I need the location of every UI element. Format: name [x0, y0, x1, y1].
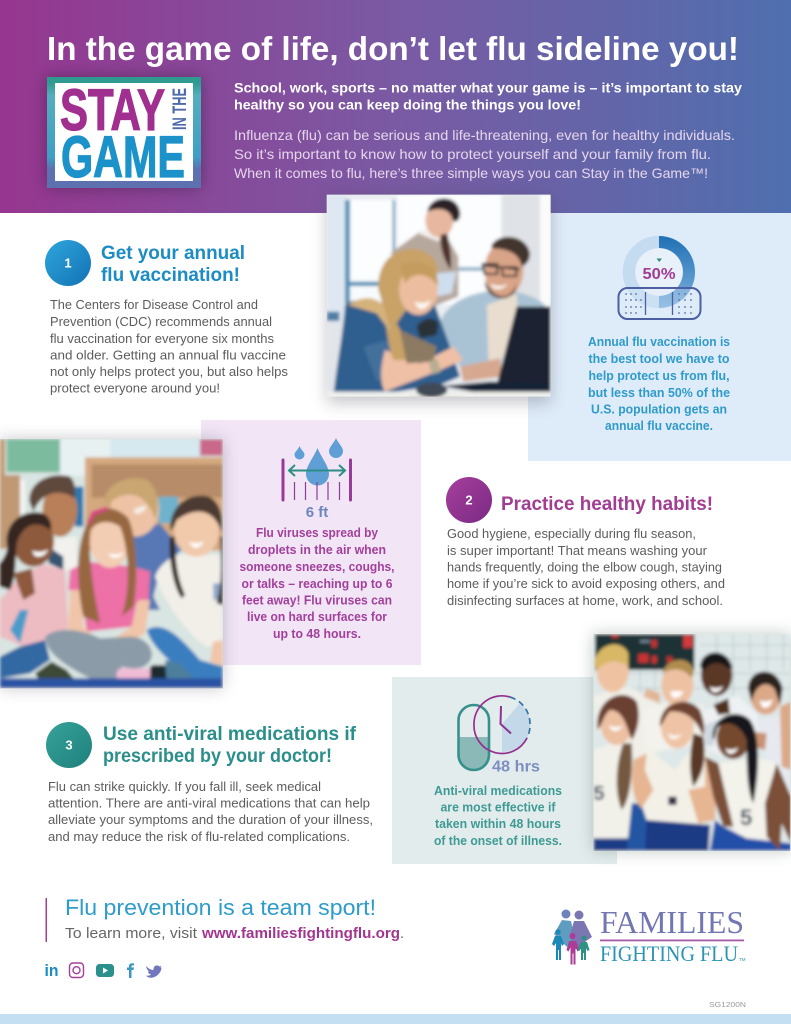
photo: volleyball team: 5	[740, 805, 752, 830]
step 2 badge	[446, 477, 492, 523]
icon: pill and clock: 48 hrs	[492, 758, 540, 776]
step 1 body: flu vaccination for everyone six months	[50, 332, 274, 346]
intro body text: Influenza (flu) can be serious and life-threatening, even for healthy individuals.	[234, 127, 735, 143]
header band	[0, 0, 791, 213]
vaccination stat text: help protect us from flu,	[588, 369, 730, 383]
panel: droplet stat background	[201, 420, 421, 665]
antiviral stat text	[434, 784, 562, 848]
footer call to action	[46, 895, 404, 942]
step 1 body	[50, 298, 288, 396]
icon: LinkedIn: in	[44, 961, 58, 980]
logo: Families Fighting Flu: FAMILIES	[600, 904, 744, 940]
icon: pill and clock	[458, 696, 540, 776]
droplet stat text: droplets in the air when	[248, 543, 386, 557]
step 3 heading	[103, 723, 356, 767]
step 3 heading: prescribed by your doctor!	[103, 745, 332, 767]
intro body text	[234, 127, 735, 181]
photo: volleyball team: 5	[593, 783, 604, 805]
step 1 body: not only helps protect you, but also helps	[50, 365, 288, 379]
footer call to action: To learn more, visit	[65, 926, 197, 942]
logo: Stay in the Game	[47, 77, 201, 190]
logo: Stay in the Game: STAY	[60, 78, 165, 143]
intro lead text: healthy so you can keep doing the things you love!	[234, 96, 581, 112]
droplet stat text	[240, 526, 394, 641]
vaccination stat text: annual flu vaccine.	[605, 419, 713, 433]
step 3 body	[48, 780, 373, 844]
icon: Twitter	[146, 965, 162, 978]
icon: YouTube	[96, 964, 114, 977]
title: In the game of life, don’t let flu sideline you!	[47, 30, 739, 67]
icon: droplets and 6 ft span	[283, 438, 350, 521]
vaccination stat text: U.S. population gets an	[591, 402, 727, 416]
logo: Stay in the Game: IN THE	[170, 88, 191, 130]
bottom band	[0, 1014, 791, 1024]
photo: children sitting on a mat	[0, 430, 230, 695]
antiviral stat text: are most effective if	[440, 800, 556, 814]
step 1 body: and older. Getting an annual flu vaccine	[50, 348, 286, 362]
droplet stat text: feet away! Flu viruses can	[242, 594, 392, 608]
step 1 body: protect everyone around you!	[50, 382, 220, 396]
icon: droplets and 6 ft span: 6 ft	[306, 504, 328, 521]
icon: Instagram	[70, 963, 84, 978]
antiviral stat text: Anti-viral medications	[434, 784, 562, 798]
step 3 body: attention. There are anti-viral medications that can help	[48, 796, 370, 810]
photo: coworkers at laptop	[320, 190, 560, 410]
step 3 body: and may reduce the risk of flu-related complications.	[48, 830, 350, 844]
icon: Facebook	[127, 963, 134, 978]
vaccination stat text: the best tool we have to	[588, 352, 730, 366]
logo: Families Fighting Flu: FIGHTING FLU	[600, 941, 738, 966]
droplet stat text: or talks – reaching up to 6	[242, 577, 392, 591]
footer call to action: .	[400, 926, 404, 942]
step 2 body: disinfecting surfaces at home, work, and school.	[447, 594, 723, 608]
intro body text: So it’s important to know how to protect yourself and your family from flu.	[234, 146, 711, 162]
intro lead text	[234, 80, 742, 112]
step 3 body: alleviate your symptoms and the duration of your illness,	[48, 813, 373, 827]
step 1 heading: flu vaccination!	[101, 264, 240, 286]
step 1 badge: 1	[64, 256, 72, 270]
logo: Families Fighting Flu	[552, 904, 746, 966]
step 1 badge	[45, 240, 91, 286]
step 2 body: home if you’re sick to avoid exposing others, and	[447, 577, 725, 591]
icon: 50% donut and bandage: 50%	[642, 266, 676, 283]
step 2 body: hands frequently, doing the elbow cough, staying	[447, 560, 722, 574]
droplet stat text: Flu viruses spread by	[256, 526, 378, 540]
step 3 badge	[46, 722, 92, 768]
intro lead text: School, work, sports – no matter what your game is – it’s important to stay	[234, 80, 742, 96]
vaccination stat text: Annual flu vaccination is	[588, 335, 730, 349]
step 2 body: is super important! That means washing your	[447, 544, 707, 558]
footer call to action: www.familiesfightingflu.org	[201, 926, 400, 942]
step 3 heading: Use anti-viral medications if	[103, 723, 356, 745]
footer call to action: Flu prevention is a team sport!	[65, 895, 376, 920]
droplet stat text: someone sneezes, coughs,	[240, 560, 394, 574]
step 2 heading: Practice healthy habits!	[501, 493, 713, 515]
step 2 body: Good hygiene, especially during flu season,	[447, 527, 696, 541]
logo figures	[552, 910, 592, 964]
step 2 body	[447, 527, 725, 608]
antiviral stat text: of the onset of illness.	[434, 834, 562, 848]
panel: vaccination stat background	[528, 213, 791, 461]
step 1 heading	[101, 242, 245, 286]
social icons	[44, 961, 162, 980]
step 3 body: Flu can strike quickly. If you fall ill, seek medical	[48, 780, 321, 794]
logo: Families Fighting Flu: TM	[739, 957, 746, 962]
panel: antiviral stat	[434, 696, 562, 848]
panel: antiviral stat background	[392, 677, 617, 864]
logo: Stay in the Game: GAME	[61, 125, 185, 190]
step 1 body: The Centers for Disease Control and	[50, 298, 258, 312]
step 1 body: Prevention (CDC) recommends annual	[50, 315, 272, 329]
droplet stat text: live on hard surfaces for	[247, 610, 387, 624]
vaccination stat text	[588, 335, 730, 433]
step 3 badge: 3	[65, 738, 73, 752]
antiviral stat text: taken within 48 hours	[435, 817, 561, 831]
panel: vaccination stat	[588, 236, 730, 433]
intro body text: When it comes to flu, here’s three simple ways you can Stay in the Game™!	[234, 165, 708, 181]
vaccination stat text: but less than 50% of the	[588, 386, 730, 400]
panel: droplet stat	[240, 438, 394, 641]
step 2 badge: 2	[465, 492, 473, 508]
icon: 50% donut and bandage	[618, 236, 700, 319]
photo: volleyball team	[590, 630, 791, 860]
document code: SG1200N	[709, 1002, 746, 1009]
droplet stat text: up to 48 hours.	[273, 627, 361, 641]
step 1 heading: Get your annual	[101, 242, 245, 264]
